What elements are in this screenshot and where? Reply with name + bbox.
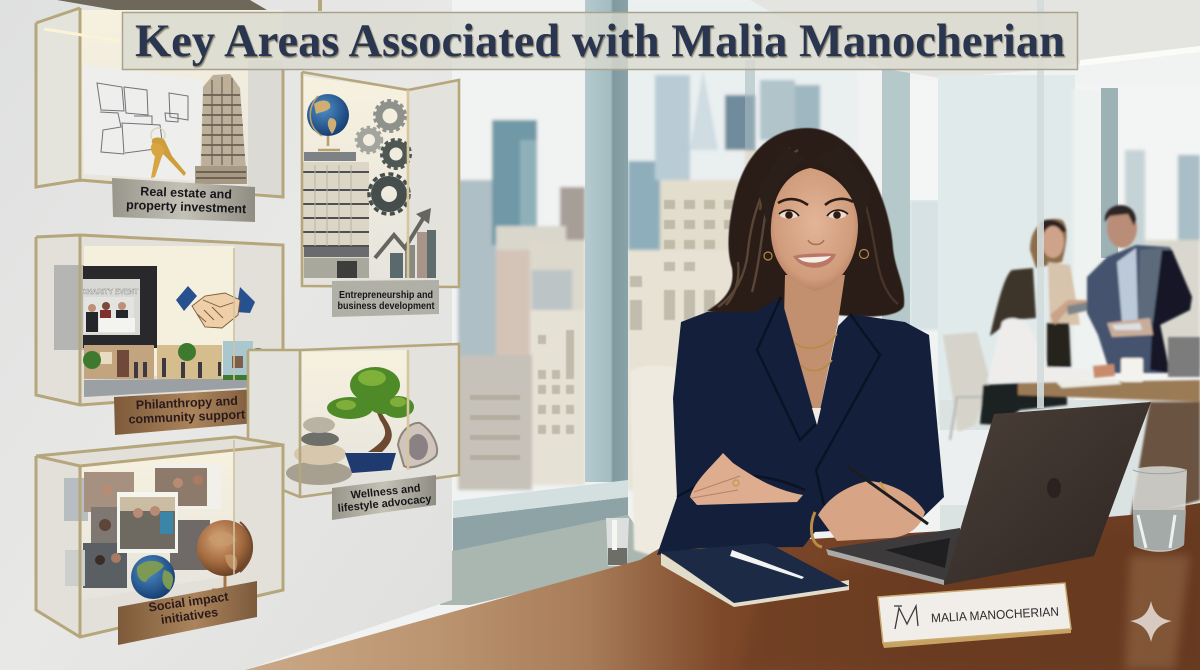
background people meeting	[943, 205, 1200, 520]
office building model	[303, 152, 369, 278]
geode	[398, 423, 437, 467]
label: entrepreneurship	[332, 280, 439, 317]
nose	[808, 240, 824, 244]
label: entrepreneurship: business development	[338, 300, 435, 312]
shelf frame	[302, 72, 459, 287]
name plate	[878, 583, 1071, 648]
face	[771, 168, 858, 291]
background laptop	[1168, 337, 1200, 377]
label: philanthropy: community support	[128, 407, 246, 427]
eyes	[780, 211, 798, 219]
label: wellness	[332, 475, 436, 520]
hair parting	[758, 145, 872, 228]
hair back	[707, 128, 904, 317]
label: philanthropy: Philanthropy and	[136, 394, 238, 412]
pen in hand	[847, 466, 928, 524]
wooden table	[245, 503, 1200, 670]
necklaces	[794, 334, 837, 348]
laptop	[826, 402, 1151, 585]
white pen on notebook	[730, 550, 804, 579]
label: wellness: Wellness and	[350, 482, 421, 502]
shelf frame	[248, 344, 459, 497]
neck	[784, 275, 845, 424]
earrings	[764, 252, 772, 260]
woman portrait	[657, 128, 944, 555]
bracelet	[811, 512, 822, 547]
icon: globe	[307, 94, 349, 150]
bonsai pot	[345, 453, 396, 473]
right hand	[818, 481, 925, 541]
building windows	[470, 200, 735, 460]
floor and window sill	[440, 515, 660, 605]
standing woman	[1030, 219, 1103, 367]
icon: handshake	[176, 286, 255, 328]
label: social impact	[118, 581, 257, 645]
framed charity picture	[54, 265, 157, 350]
title text: Key Areas Associated with Malia Manocherian	[135, 15, 1065, 67]
panel: entrepreneurship shelf	[302, 72, 459, 287]
bonsai tree	[327, 367, 414, 473]
left hand	[690, 453, 803, 505]
icon: earth globe	[131, 555, 175, 599]
stacked stones	[286, 417, 352, 485]
framed charity picture: CHARITY EVENT	[82, 289, 139, 296]
shelf frame	[36, 235, 283, 405]
shelf frame	[36, 8, 283, 197]
apple logo mark	[1047, 478, 1061, 498]
blazer	[657, 297, 944, 555]
title banner	[122, 12, 1078, 70]
seated woman	[980, 268, 1115, 425]
M monogram	[894, 606, 918, 629]
blueprint	[83, 65, 203, 181]
small glass left	[606, 518, 629, 566]
community village model	[83, 341, 276, 397]
icon: growth chart	[375, 208, 436, 278]
icon: gears	[356, 100, 410, 214]
label: social impact: initiatives	[160, 605, 219, 627]
label: social impact: Social impact	[148, 589, 230, 615]
background cup	[1121, 358, 1143, 382]
label: entrepreneurship: Entrepreneurship and	[339, 289, 433, 301]
icon: copper globe	[197, 520, 253, 590]
icon: keys	[151, 128, 186, 178]
meeting table	[1018, 380, 1200, 402]
mouth	[793, 253, 836, 268]
panel: philanthropy shelf	[36, 235, 283, 405]
ceiling	[750, 0, 1200, 78]
tower model	[195, 74, 247, 184]
panel: real estate shelf	[36, 8, 283, 197]
panel: social impact shelf	[36, 437, 283, 637]
panel: wellness shelf	[248, 344, 459, 497]
window mullions	[585, 0, 628, 482]
eyebrows	[778, 199, 808, 205]
label: real estate: property investment	[126, 198, 247, 216]
notebook	[661, 543, 849, 607]
city view through windows	[455, 0, 940, 490]
right inner wall	[938, 75, 1075, 425]
left wall	[0, 0, 452, 670]
icon: sparkle watermark	[1130, 601, 1172, 642]
shelf above the top edge	[57, 0, 322, 11]
label: real estate	[112, 178, 255, 222]
label: philanthropy	[114, 389, 257, 435]
office chair behind subject	[630, 365, 680, 555]
glass divider	[1037, 0, 1044, 408]
shelf frame	[36, 437, 283, 637]
label: real estate: Real estate and	[140, 184, 232, 202]
label: wellness: lifestyle advocacy	[337, 493, 433, 515]
chair behind meeting	[943, 332, 1020, 440]
name text: MALIA MANOCHERIAN	[931, 605, 1059, 625]
photo collage	[64, 464, 221, 588]
water glass	[1132, 466, 1187, 552]
man in suit	[1087, 205, 1192, 373]
